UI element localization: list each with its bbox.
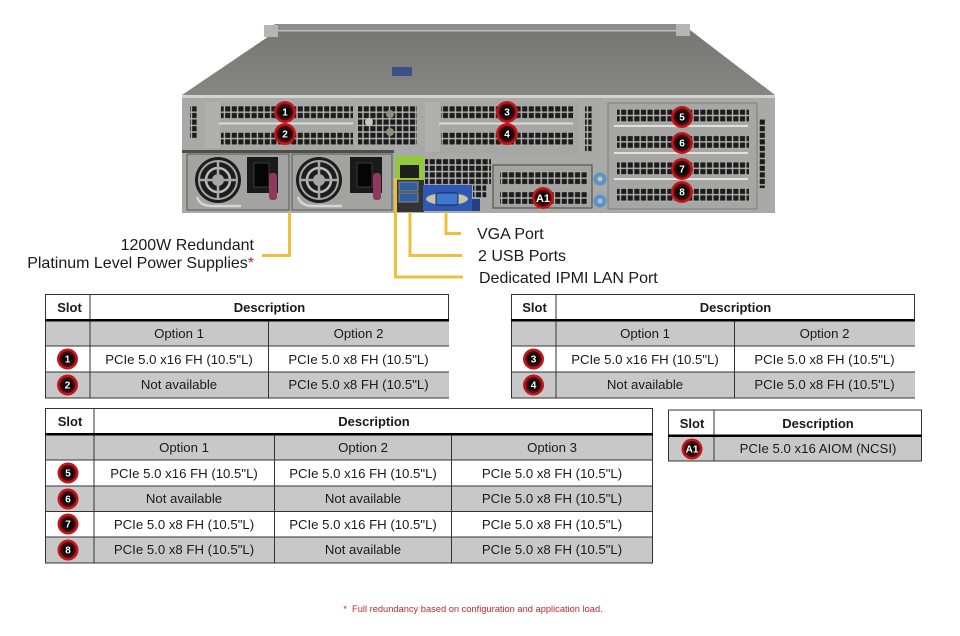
badge 3: 3 <box>504 108 510 118</box>
badge 2: 2 <box>282 130 288 140</box>
table: slots 3 and 4: PCIe 5.0 x16 FH (10.5"L) <box>571 352 719 367</box>
table badge 8 <box>58 540 78 560</box>
callout: power supplies: Platinum Level Power Supplies* <box>27 255 254 272</box>
table: slots 5 to 8: PCIe 5.0 x8 FH (10.5"L) <box>114 542 254 557</box>
table: slots 5 to 8: Option 3 <box>527 440 577 455</box>
badge 5 <box>671 106 693 128</box>
VGA port <box>423 185 480 211</box>
centre vents <box>358 106 417 145</box>
badge 1 <box>274 101 296 123</box>
badge 3 <box>496 101 518 123</box>
riser bracket left <box>205 102 355 150</box>
callout: power supplies <box>27 237 255 272</box>
VGA leader <box>446 212 461 234</box>
table badge 2: 2 <box>65 380 71 392</box>
power supply 1 <box>187 154 289 210</box>
table badge 7: 7 <box>65 520 71 530</box>
table: slots 3 and 4: PCIe 5.0 x8 FH (10.5"L) <box>754 352 895 367</box>
table: slots 1 and 2 <box>45 294 449 398</box>
table: slots 3 and 4: Option 1 <box>620 326 670 341</box>
slot badges on chassis <box>274 101 693 209</box>
badge A1: A1 <box>536 193 550 205</box>
table: slots 5 to 8 <box>45 408 653 563</box>
table: slot A1: PCIe 5.0 x16 AIOM (NCSI) <box>740 441 896 456</box>
badge 8: 8 <box>679 188 685 198</box>
table: slots 3 and 4: Option 2 <box>800 326 849 341</box>
table: slots 1 and 2: PCIe 5.0 x16 FH (10.5"L) <box>105 352 253 367</box>
table: slots 1 and 2: Slot <box>57 300 82 315</box>
left edge vents <box>190 106 197 139</box>
table badge 5: 5 <box>65 468 71 480</box>
table: slot A1: Description <box>782 416 854 431</box>
table badge 1 <box>57 348 78 370</box>
table badge A1: A1 <box>686 444 699 456</box>
table: slots 3 and 4: PCIe 5.0 x8 FH (10.5"L) <box>754 377 895 392</box>
table badge 6: 6 <box>65 494 71 506</box>
badge 6 <box>671 132 693 154</box>
table: slots 5 to 8: Not available <box>325 542 401 557</box>
table badge A1 <box>682 438 702 460</box>
vents beside VGA <box>425 158 491 185</box>
badge A1 <box>532 187 554 209</box>
riser bracket middle <box>425 102 578 154</box>
USB ports <box>394 180 424 212</box>
power supply 2 <box>292 154 392 210</box>
table: slots 5 to 8: Description <box>338 414 410 429</box>
table: slots 3 and 4: Description <box>700 300 771 315</box>
table: slot A1 <box>668 410 922 461</box>
right riser cage <box>608 103 757 209</box>
server chassis <box>182 24 775 213</box>
table: slots 1 and 2: PCIe 5.0 x8 FH (10.5"L) <box>288 377 429 392</box>
table: slots 1 and 2: Description <box>234 300 305 315</box>
table badge 2 <box>57 374 78 396</box>
table: slots 1 and 2: Not available <box>141 377 217 392</box>
table: slots 3 and 4 <box>511 294 915 398</box>
rear panel <box>182 95 775 213</box>
top cover <box>182 24 775 95</box>
table: slots 5 to 8: Option 2 <box>338 440 388 455</box>
table badge 3 <box>523 348 544 370</box>
LAN leader <box>396 178 463 277</box>
table: slots 1 and 2: Option 1 <box>154 326 204 341</box>
table: slots 3 and 4: Not available <box>607 377 683 392</box>
table badge 5 <box>58 462 78 484</box>
table badge 1: 1 <box>65 354 71 366</box>
table badge 6 <box>58 488 78 510</box>
table: slots 1 and 2: Option 2 <box>334 326 383 341</box>
badge 2 <box>274 123 296 145</box>
table: slots 5 to 8: PCIe 5.0 x16 FH (10.5"L) <box>289 466 437 481</box>
callout: VGA port: VGA Port <box>477 226 544 243</box>
right edge vents <box>759 119 766 188</box>
badge 7: 7 <box>679 164 685 176</box>
table badge 8: 8 <box>65 546 71 556</box>
USB leader <box>410 212 462 256</box>
table badge 7 <box>58 514 78 534</box>
badge 7 <box>671 158 693 180</box>
badge 5: 5 <box>679 112 685 124</box>
cover latch <box>392 67 412 76</box>
footnote: * Full redundancy based on configuration and application load. <box>343 604 603 614</box>
table badge 3: 3 <box>531 354 537 366</box>
table: slot A1: Slot <box>680 416 705 431</box>
table: slots 5 to 8: PCIe 5.0 x8 FH (10.5"L) <box>482 517 622 532</box>
table: slots 1 and 2: PCIe 5.0 x8 FH (10.5"L) <box>288 352 429 367</box>
table: slots 5 to 8: PCIe 5.0 x16 FH (10.5"L) <box>110 466 258 481</box>
IPMI LAN port <box>395 156 424 180</box>
badge 1: 1 <box>282 108 288 118</box>
table: slots 5 to 8: Not available <box>325 491 401 506</box>
table: slots 5 to 8: PCIe 5.0 x8 FH (10.5"L) <box>114 517 254 532</box>
table badge 4: 4 <box>531 380 537 392</box>
blue thumbscrews <box>594 172 606 208</box>
callout: USB ports: 2 USB Ports <box>478 248 566 265</box>
badge 8 <box>671 181 693 203</box>
badge 4: 4 <box>504 130 510 140</box>
table: slots 5 to 8: PCIe 5.0 x16 FH (10.5"L) <box>289 517 437 532</box>
badge 4 <box>496 123 518 145</box>
table: slots 5 to 8: PCIe 5.0 x8 FH (10.5"L) <box>482 542 622 557</box>
yellow leader lines <box>262 178 463 277</box>
table: slots 3 and 4: Slot <box>522 300 547 315</box>
table: slots 5 to 8: PCIe 5.0 x8 FH (10.5"L) <box>482 466 622 481</box>
table: slots 5 to 8: Option 1 <box>159 440 209 455</box>
table: slots 5 to 8: Slot <box>58 414 83 429</box>
AIOM slot <box>493 165 592 208</box>
table: slots 5 to 8: PCIe 5.0 x8 FH (10.5"L) <box>482 491 622 506</box>
table: slots 5 to 8: Not available <box>146 491 222 506</box>
table badge 4 <box>523 374 544 396</box>
badge 6: 6 <box>679 138 685 150</box>
callout: power supplies: 1200W Redundant <box>121 237 255 254</box>
power supply leader <box>262 212 290 256</box>
callout: LAN port: Dedicated IPMI LAN Port <box>479 270 658 287</box>
